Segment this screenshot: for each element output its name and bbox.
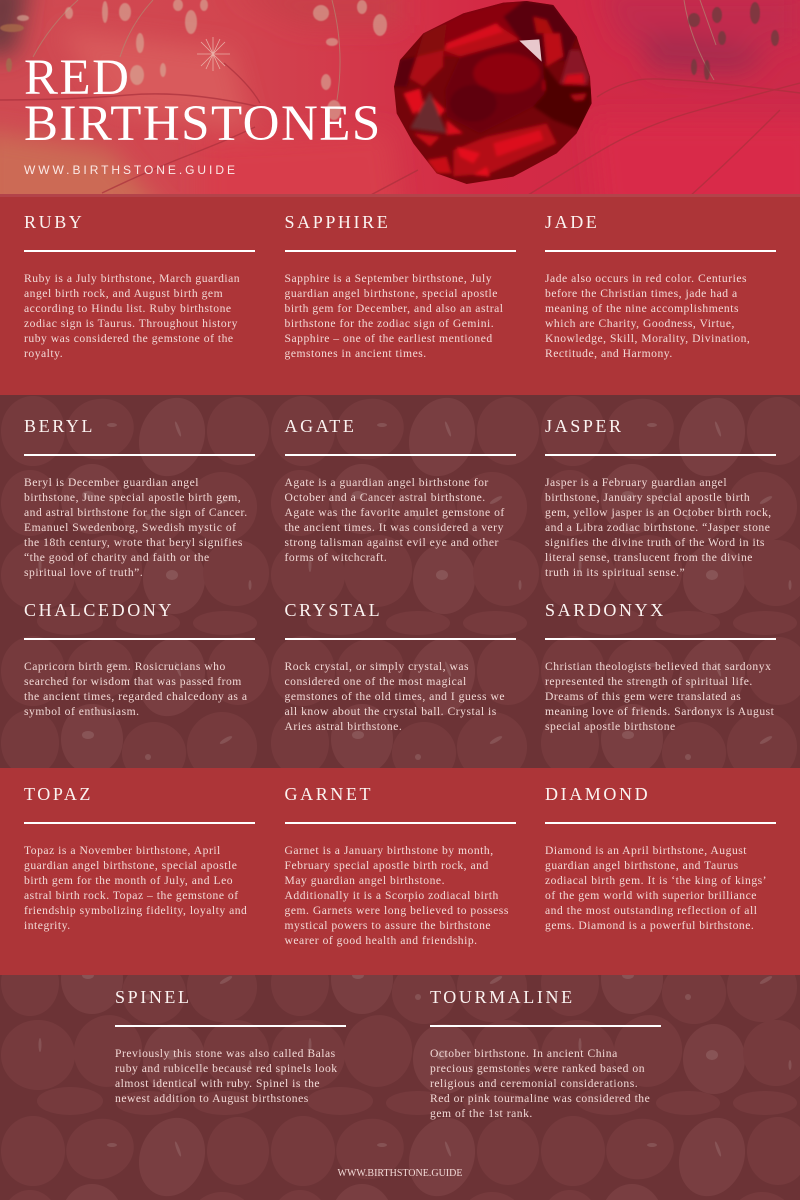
card: spinel: [115, 987, 346, 1104]
card: jasper: Jasper is a February guardian angel: [545, 476, 727, 488]
card: diamond: [545, 784, 776, 932]
card: sapphire: Sapphire is a September birthstone, July: [284, 272, 492, 284]
title: [24, 50, 382, 152]
card: topaz: astral birth rock. Topaz – the gemstone of: [24, 888, 239, 902]
card: agate: forms of witchcraft.: [284, 550, 387, 564]
pebble background: [1, 396, 800, 1200]
card: topaz: Topaz is a November birthstone, April: [24, 844, 221, 856]
card: crystal: CRYSTAL: [284, 600, 382, 620]
card: topaz: birth gem for the month of July, and Leo: [24, 874, 233, 886]
card: sapphire: [284, 212, 516, 360]
card: crystal: [284, 600, 516, 732]
icon: red ruby gemstone: [394, 1, 592, 184]
title: RED: [24, 50, 130, 106]
card: ruby: Ruby is a July birthstone, March guardian: [24, 272, 240, 284]
card: ruby: angel birth rock, and August birth gem: [24, 286, 223, 300]
card: ruby: zodiac sign is Taurus. Throughout history: [24, 316, 238, 330]
card: chalcedony: the ancient times, regarded chalcedony as a: [24, 690, 248, 702]
card: sapphire: gemstones in ancient times.: [284, 346, 427, 360]
card: ruby: ruby was considered the gemstone of the: [24, 332, 234, 344]
card: jade: [545, 212, 776, 360]
red band: top row: [0, 197, 800, 395]
card: chalcedony: Capricorn birth gem. Rosicrucians who: [24, 660, 226, 672]
card: jade: JADE: [545, 212, 599, 232]
card: ruby: according to Hindu list. Ruby birthstone: [24, 302, 232, 314]
subtitle url: WWW.BIRTHSTONE.GUIDE: [24, 163, 238, 177]
card: agate: [284, 416, 516, 564]
card: jade: meaning of the nine accomplishments: [545, 302, 739, 314]
red band: fourth row: [0, 768, 800, 975]
card: spinel: almost identical with ruby. Spinel is the: [115, 1076, 320, 1090]
card: jasper: literal sense, translucent from the divine: [545, 550, 753, 564]
card: tourmaline: TOURMALINE: [430, 987, 575, 1007]
card: jasper: birthstone, January special apostle birth: [545, 490, 750, 504]
card: topaz: friendship symbolizing fidelity, loyalty and: [24, 904, 247, 916]
card: crystal: considered one of the most magical: [284, 674, 467, 688]
card: garnet: Additionally it is a Scorpio zodiacal birth: [284, 888, 499, 902]
card: agate: the ancient times. It was considered a very: [284, 520, 504, 534]
card: beryl: Emanuel Swedenborg, Swedish mystic of: [24, 520, 237, 534]
card: chalcedony: [24, 600, 255, 718]
card: ruby: [24, 212, 255, 360]
card: chalcedony: CHALCEDONY: [24, 600, 174, 620]
card: tourmaline: [430, 987, 661, 1120]
card: jasper: JASPER: [545, 416, 624, 436]
card: crystal: Rock crystal, or simply crystal, was: [284, 660, 469, 672]
card: agate: AGATE: [284, 416, 356, 436]
card: topaz: TOPAZ: [24, 784, 93, 804]
card: diamond: guardian angel birthstone, and Taurus: [545, 858, 739, 872]
card: spinel: Previously this stone was also called Balas: [115, 1046, 336, 1060]
card: crystal: all know about the crystal ball. Crystal is: [284, 704, 497, 718]
card: agate: October and a Cancer astral birthstone.: [284, 490, 486, 504]
card: garnet: May guardian angel birthstone.: [284, 874, 445, 886]
card: tourmaline: October birthstone. In ancient China: [430, 1046, 618, 1060]
card: jasper: and a Libra zodiac birthstone. “Jasper stone: [545, 520, 770, 534]
card: garnet: mystical powers to assure the birthstone: [284, 918, 491, 932]
card: sardonyx: SARDONYX: [545, 600, 666, 620]
card: diamond: Diamond is an April birthstone, August: [545, 844, 747, 856]
card: tourmaline: Red or pink tourmaline was considered the: [430, 1092, 650, 1104]
card: beryl: Beryl is December guardian angel: [24, 476, 199, 488]
card: sapphire: SAPPHIRE: [284, 212, 390, 232]
card: diamond: zodiacal birth gem. It is ‘the king of kings’: [545, 874, 767, 886]
card: topaz: guardian angel birthstone, special apostle: [24, 858, 237, 872]
card: topaz: [24, 784, 255, 932]
card: sardonyx: Christian theologists believed that sardonyx: [545, 660, 771, 672]
card: jade: Rectitude, and Harmony.: [545, 346, 673, 360]
card: garnet: gem. Garnets were long believed to possess: [284, 904, 509, 916]
card: agate: strong talisman against evil eye and other: [284, 536, 499, 548]
card: sapphire: Sapphire – one of the earliest mentioned: [284, 332, 493, 344]
card: ruby: RUBY: [24, 212, 84, 232]
footer url: WWW.BIRTHSTONE.GUIDE: [338, 1168, 462, 1179]
card: spinel: ruby and rubicelle because red spinels look: [115, 1062, 338, 1074]
card: jasper: signifies the divine truth of the Word in its: [545, 536, 765, 548]
card: garnet: Garnet is a January birthstone by month,: [284, 844, 494, 856]
card: diamond: DIAMOND: [545, 784, 650, 804]
card: tourmaline: gem of the 1st rank.: [430, 1106, 533, 1120]
card: sardonyx: Dreams of this gem were translated as: [545, 690, 741, 702]
card: topaz: integrity.: [24, 918, 71, 932]
card: garnet: [284, 784, 516, 946]
card: spinel: SPINEL: [115, 987, 192, 1007]
card: beryl: the 18th century, wrote that beryl signifies: [24, 536, 243, 548]
text: wearer of good health and friendship.: [284, 934, 478, 946]
text: truth in its spiritual sense.”: [545, 566, 685, 578]
card: sardonyx: meaning love of friends. Sardonyx is August: [545, 704, 774, 718]
icon: sparkle star: [197, 37, 230, 71]
card: beryl: birthstone, June special apostle birth gem,: [24, 490, 241, 504]
card: tourmaline: religious and ceremonial considerations.: [430, 1076, 638, 1090]
card: agate: Agate is a guardian angel birthstone for: [284, 476, 489, 488]
card: spinel: newest addition to August birthstones: [115, 1092, 309, 1104]
title: BIRTHSTONES: [24, 96, 382, 152]
card: sardonyx: represented the strength of spiritual life.: [545, 674, 753, 688]
card: diamond: gems. Diamond is a powerful birthstone.: [545, 918, 754, 932]
card: beryl: and astral birthstone for the sign of Cancer.: [24, 506, 248, 518]
text: spiritual love of truth”.: [24, 566, 143, 578]
card: agate: Agate was the favorite amulet gemstone of: [284, 506, 505, 518]
hero photo background: [0, 0, 800, 197]
card: tourmaline: precious gemstones were ranked based on: [430, 1062, 645, 1074]
card: beryl: [24, 416, 255, 578]
card: jade: Knowledge, Skill, Morality, Divination,: [545, 332, 750, 344]
card: jade: Jade also occurs in red color. Centuries: [545, 272, 747, 284]
card: sapphire: birth gem for December, and also an astral: [284, 302, 504, 314]
card: garnet: GARNET: [284, 784, 373, 804]
card: beryl: BERYL: [24, 416, 95, 436]
card: chalcedony: symbol of enthusiasm.: [24, 704, 140, 718]
card: chalcedony: searched for wisdom that was passed from: [24, 674, 242, 688]
card: ruby: royalty.: [24, 346, 63, 360]
card: sapphire: guardian angel birthstone, special apostle: [284, 286, 498, 300]
card: crystal: Aries astral birthstone.: [284, 720, 402, 732]
card: diamond: and the most outstanding reflection of all: [545, 904, 757, 916]
card: crystal: gemstones of the old times, and I guess we: [284, 690, 505, 702]
card: jade: which are Charity, Goodness, Virtue,: [545, 316, 735, 330]
card: jasper: gem, yellow jasper is an October birth rock,: [545, 506, 772, 518]
card: sardonyx: special apostle birthstone: [545, 720, 676, 732]
card: jade: before the Christian times, jade had a: [545, 286, 738, 300]
card: jasper: [545, 416, 776, 578]
card: sapphire: birthstone for the zodiac sign of Gemini.: [284, 316, 494, 330]
card: beryl: “the good of charity and faith or the: [24, 550, 210, 564]
card: diamond: of the gem world with superior brilliance: [545, 888, 757, 902]
card: garnet: February special apostle birth rock, and: [284, 858, 489, 872]
card: sardonyx: [545, 600, 776, 732]
